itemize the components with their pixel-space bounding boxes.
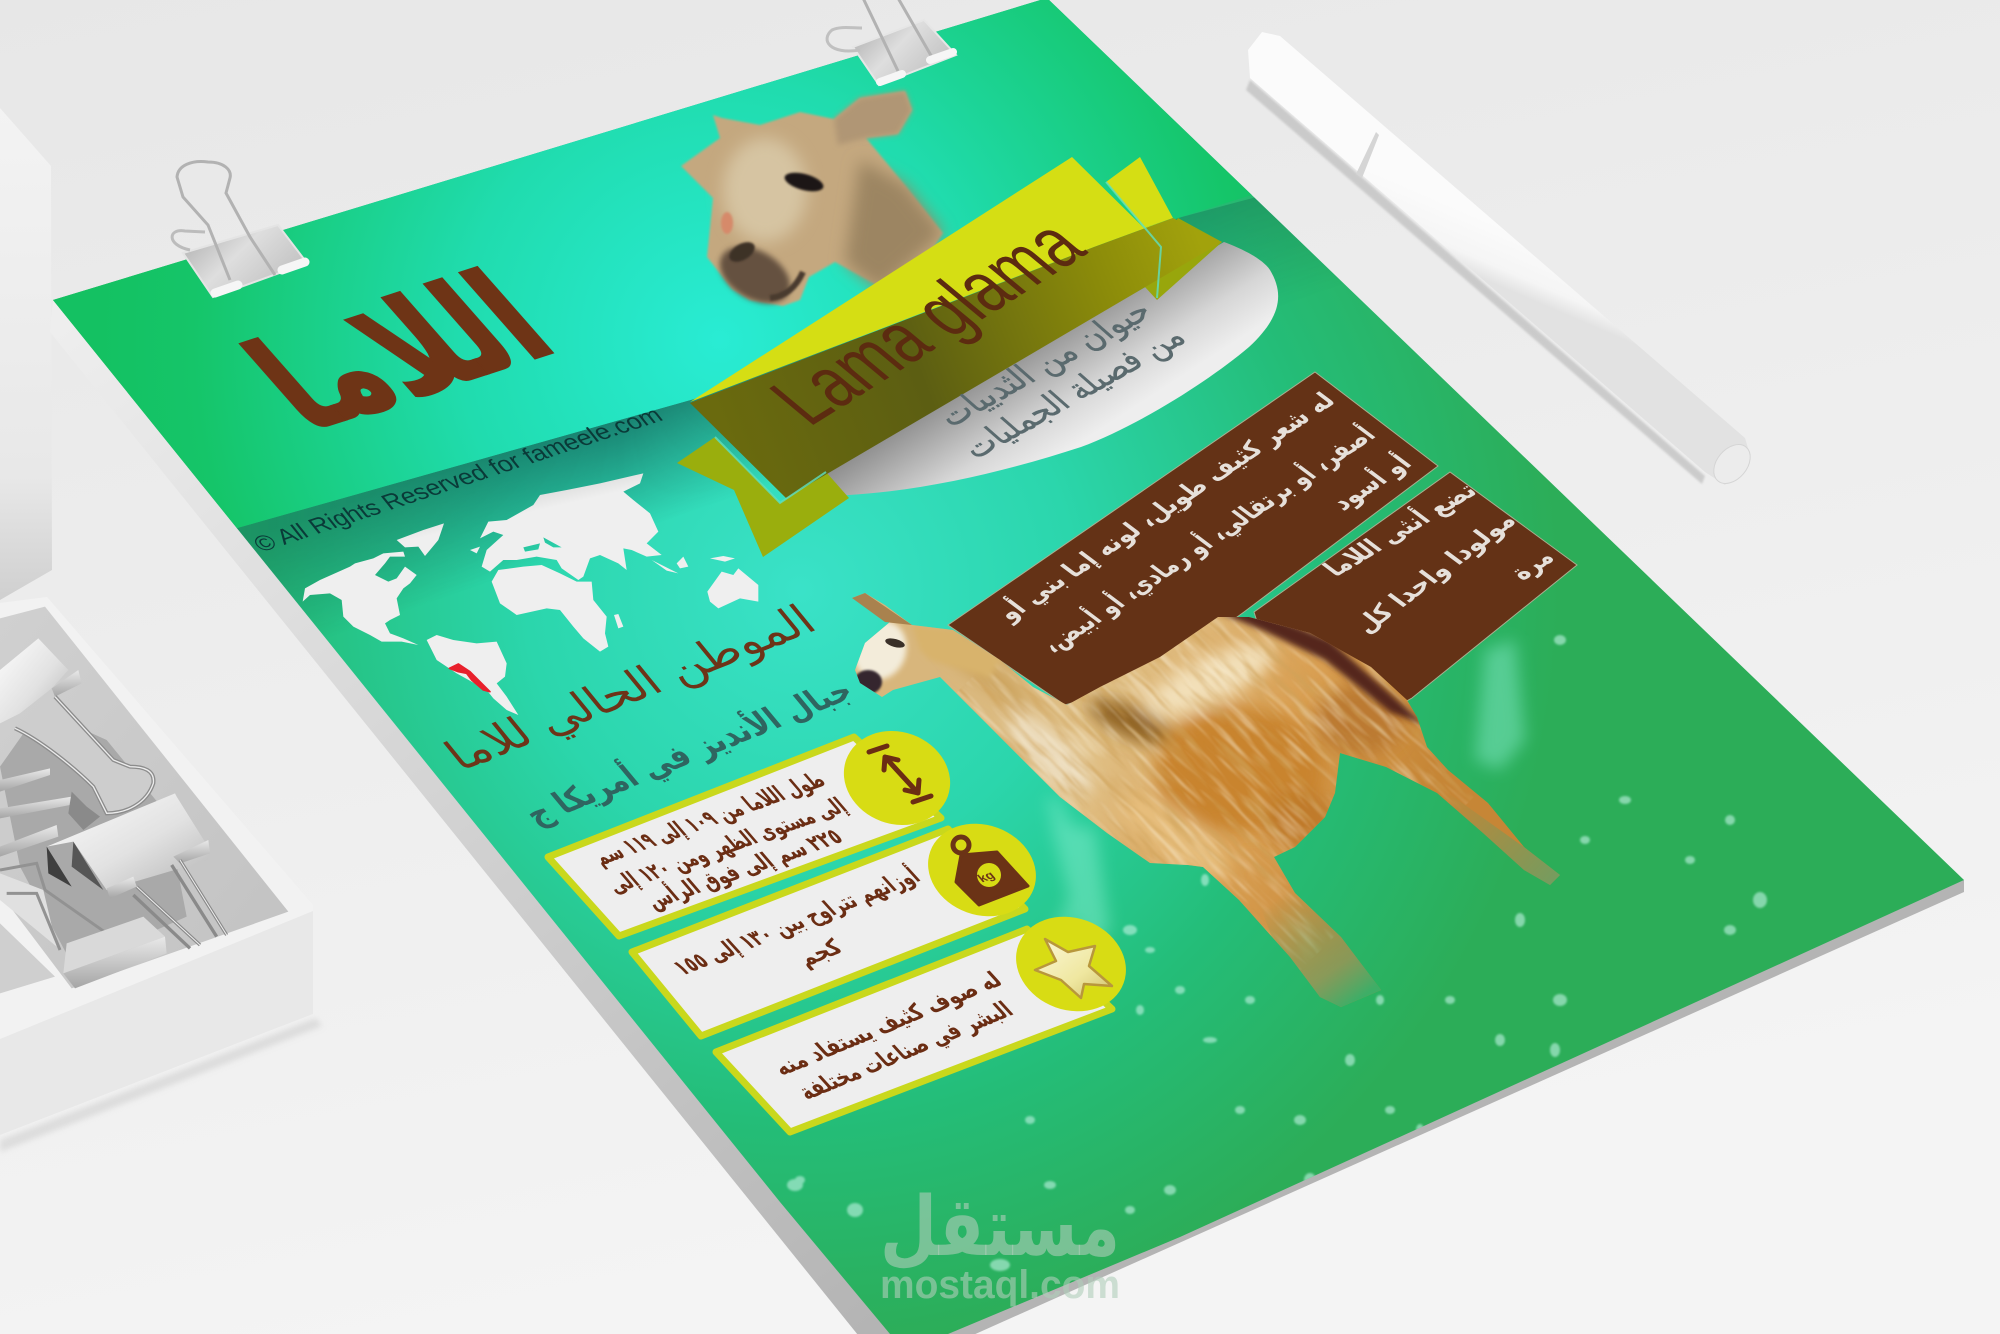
head eye (783, 171, 825, 193)
height icon badge (831, 716, 963, 840)
title: اللاما (215, 246, 585, 459)
clip left wire (177, 162, 275, 280)
tray front face (0, 911, 313, 1135)
watermark arabic: مستقل (880, 1180, 1120, 1275)
clip left plate (183, 225, 307, 297)
Africa (492, 565, 608, 652)
ghost llama shapes in the backdrop (1050, 640, 1525, 950)
world map (303, 473, 758, 715)
icon: kg weight: kg (974, 868, 998, 885)
height text line 1: طول اللاما من ١٠٩ إلى ١١٩ سم (586, 767, 832, 871)
pen tip (1706, 438, 1758, 490)
llama fur patches (936, 630, 1405, 890)
grass dots (787, 635, 1786, 1271)
head light fur (723, 138, 807, 242)
head neck shading (845, 160, 943, 290)
white blob (786, 242, 1278, 498)
brown panel: coat (948, 372, 1438, 705)
pen shadow (1246, 80, 1705, 484)
clip left small loop (172, 231, 205, 250)
head mouth (770, 272, 803, 298)
paper stack edge (50, 300, 1964, 1334)
Eurasia (480, 473, 662, 580)
Greenland (397, 523, 444, 556)
tray body (0, 597, 313, 1135)
llama leg fade hind (1420, 780, 1570, 900)
clip left lower bars (215, 262, 305, 293)
wool text line 2: البشر في صناعات مختلفة (792, 997, 1020, 1105)
habitat text: جبال الأنديز في أمريكا ج (514, 670, 862, 833)
head cheek mark (721, 212, 733, 234)
description line 1: حيوان من الثدييات (928, 294, 1161, 434)
fact card: weight (632, 809, 1049, 1036)
clip top plate (853, 20, 956, 85)
ribbon fold line (715, 182, 1161, 503)
tray shadow (0, 1018, 322, 1152)
South America (427, 635, 518, 715)
brown panel: offspring (1254, 472, 1577, 760)
weight text line 2: كجم (790, 934, 849, 971)
height text line 2: إلى مستوى الظهر ومن ١٢٠ إلى (600, 793, 853, 899)
icon: kg weight (953, 837, 1028, 905)
fold shadow under header (237, 198, 1318, 622)
watermark (880, 1180, 1120, 1307)
weight icon badge (915, 809, 1049, 931)
storage box at left edge (0, 108, 52, 600)
llama muzzle (854, 670, 882, 694)
binder clips in tray (0, 607, 288, 993)
ribbon left tail (677, 437, 849, 557)
ribbon right tail bright (1106, 157, 1173, 228)
habitat heading: الموطن الحالي للاما (434, 596, 827, 780)
watermark latin: mostaql.com (880, 1263, 1120, 1307)
coat line 2: أصفر، أو برتقالي، أو رمادي، أو أبيض، (1032, 421, 1382, 658)
ribbon shaded band (690, 218, 1222, 498)
llama ear (852, 593, 912, 625)
llama figure (845, 457, 1570, 1023)
llama neck gold (912, 625, 1000, 678)
binder clip left (172, 162, 307, 297)
Andes highlight (449, 664, 490, 692)
pen cap ring (1356, 132, 1379, 178)
clip top lower bars (880, 52, 953, 82)
ribbon bright band (690, 157, 1173, 402)
desk tray with binder clips (0, 597, 322, 1152)
wool icon badge (1003, 902, 1139, 1026)
llama eye (884, 637, 906, 649)
ribbon label: Lama glama (751, 204, 1103, 439)
coat line 1: له شعر كثيف طويل، لونه إما بني أو (987, 386, 1342, 627)
llama leg fade front (1250, 870, 1400, 1010)
Australia and islands (470, 547, 758, 628)
fact card: wool (716, 902, 1139, 1132)
description line 2: من فصيلة الجمليات (953, 320, 1194, 465)
wool text line 1: له صوف كثيف يستفاد منه (767, 967, 1008, 1081)
binder clip top (827, 0, 956, 85)
head muzzle (716, 244, 793, 308)
llama head photo (681, 91, 943, 315)
height text line 3: ٢٢٥ سم إلى فوق الرأس (637, 822, 849, 914)
offspring line 1: تضع أنثى اللاما (1315, 477, 1484, 582)
ribbon banner with white speech blob (677, 157, 1278, 557)
ribbon right tail olive (1145, 218, 1222, 300)
llama fur texture light (937, 457, 1503, 1023)
llama silhouette (852, 593, 1560, 1007)
icon: star (1035, 939, 1112, 998)
copyright line: © All Rights Reserved for fameele.com (248, 402, 668, 557)
llama fur texture dark (937, 457, 1503, 1023)
icon: height arrow (869, 746, 931, 802)
clip top wires (863, 0, 933, 71)
blob description (946, 308, 1184, 457)
head nostril (728, 240, 756, 262)
pen (1246, 32, 1758, 490)
coat line 3: أو أسود (1322, 449, 1418, 516)
offspring line 3: مرة (1504, 545, 1561, 585)
poster header panel (53, 0, 1252, 528)
North America (303, 552, 418, 645)
fact card: height (548, 716, 963, 936)
weight text line 1: أوزانهم تتراوح بين ١٣٠ إلى ١٥٥ (666, 862, 926, 981)
llama dark back (1218, 612, 1425, 725)
llama face light (845, 613, 915, 687)
clip top small loop (827, 28, 862, 51)
head hair tuft (834, 91, 912, 145)
offspring line 2: مولودا واحدا كل (1348, 508, 1523, 639)
pen barrel (1248, 32, 1750, 485)
